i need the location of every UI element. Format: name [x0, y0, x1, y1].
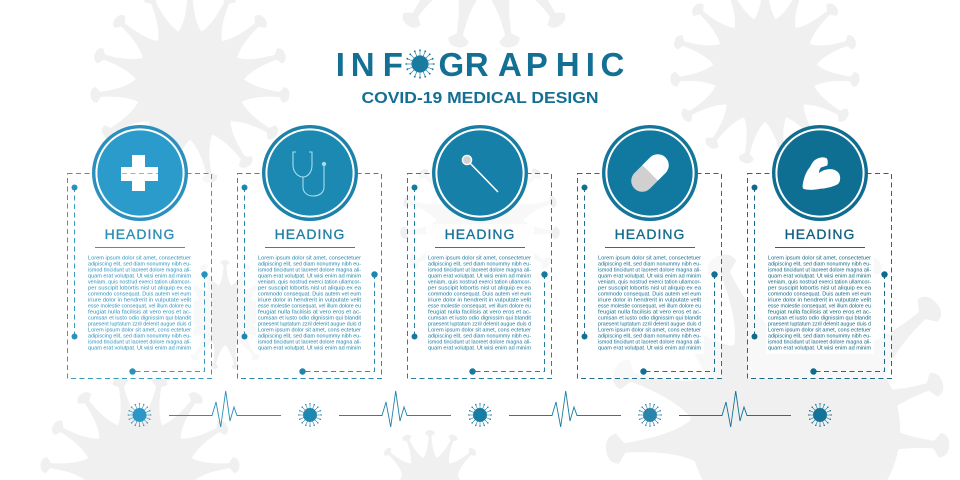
text block: per suscipit lobortis nisl ut aliquip ex ea: [428, 285, 532, 291]
text block: per suscipit lobortis nisl ut aliquip ex ea: [768, 285, 872, 291]
heartbeat line 1: [169, 391, 281, 427]
text block: Lorem ipsum dolor sit amet, cons ectetuer: [88, 327, 191, 333]
icon: stethoscope: [293, 152, 326, 196]
text block: per suscipit lobortis nisl ut aliquip ex ea: [258, 285, 362, 291]
icon: virus 1: [128, 403, 151, 427]
text block: praesent luptatum zzril delenit augue duis d: [598, 321, 701, 327]
text block: praesent luptatum zzril delenit augue duis d: [258, 321, 361, 327]
text block: ismod tincidunt ut laoreet dolore magna ali-: [258, 267, 361, 273]
text block: [768, 255, 872, 351]
text block: commodo consequat. Duis autem vel eum: [598, 291, 701, 297]
text block: ismod tincidunt ut laoreet dolore magna ali-: [258, 339, 361, 345]
subtitle: COVID-19 MEDICAL DESIGN: [362, 90, 598, 107]
text block: quam erat volutpat. Ut wisi enim ad minim: [258, 345, 361, 351]
text block: quam erat volutpat. Ut wisi enim ad minim: [258, 273, 361, 279]
text block: iriure dolor in hendrerit in vulputate velit: [598, 297, 702, 303]
text block: feugiat nulla facilisis at vero eros et ac-: [88, 309, 191, 315]
text block: adipiscing elit, sed diam nonummy nibh eu-: [768, 261, 871, 267]
text block: commodo consequat. Duis autem vel eum: [258, 291, 361, 297]
text block: [258, 255, 362, 351]
icon: virus letter O: [405, 49, 435, 79]
text block: quam erat volutpat. Ut wisi enim ad minim: [88, 345, 191, 351]
text block: esse molestie consequat, vel illum dolore eu: [88, 303, 191, 309]
text block: feugiat nulla facilisis at vero eros et ac-: [768, 309, 871, 315]
text block: esse molestie consequat, vel illum dolore eu: [258, 303, 361, 309]
text block: cumsan et iusto odio dignissim qui blandit: [88, 315, 191, 321]
title: [336, 46, 624, 107]
text block: [428, 255, 532, 351]
text block: esse molestie consequat, vel illum dolore eu: [598, 303, 701, 309]
text block: ismod tincidunt ut laoreet dolore magna ali-: [88, 339, 191, 345]
text block: Lorem ipsum dolor sit amet, cons ectetuer: [258, 327, 361, 333]
text block: adipiscing elit, sed diam nonummy nibh eu-: [428, 261, 531, 267]
text block: adipiscing elit, sed diam nonummy nibh eu-: [88, 261, 191, 267]
heading: HEADING: [445, 226, 515, 242]
text block: cumsan et iusto odio dignissim qui blandit: [598, 315, 701, 321]
text block: commodo consequat. Duis autem vel eum: [428, 291, 531, 297]
text block: commodo consequat. Duis autem vel eum: [768, 291, 871, 297]
text block: Lorem ipsum dolor sit amet, consectetuer: [768, 255, 871, 261]
text block: iriure dolor in hendrerit in vulputate velit: [88, 297, 192, 303]
text block: adipiscing elit, sed diam nonummy nibh eu-: [598, 333, 701, 339]
text block: adipiscing elit, sed diam nonummy nibh eu-: [598, 261, 701, 267]
heading: HEADING: [275, 226, 345, 242]
icon: virus 3: [468, 403, 492, 427]
text block: esse molestie consequat, vel illum dolore eu: [768, 303, 871, 309]
text block: per suscipit lobortis nisl ut aliquip ex ea: [598, 285, 702, 291]
heading: HEADING: [105, 226, 175, 242]
text block: cumsan et iusto odio dignissim qui blandit: [768, 315, 871, 321]
title word: INFOGRAPHIC: INF: [336, 46, 403, 83]
text block: praesent luptatum zzril delenit augue duis d: [768, 321, 871, 327]
text block: Lorem ipsum dolor sit amet, consectetuer: [88, 255, 191, 261]
text block: praesent luptatum zzril delenit augue duis d: [428, 321, 531, 327]
text block: ismod tincidunt ut laoreet dolore magna ali-: [428, 339, 531, 345]
text block: quam erat volutpat. Ut wisi enim ad minim: [88, 273, 191, 279]
heartbeat line 4: [679, 391, 791, 427]
text block: Lorem ipsum dolor sit amet, cons ectetuer: [598, 327, 701, 333]
text block: ismod tincidunt ut laoreet dolore magna ali-: [598, 267, 701, 273]
panel: card 4: [578, 125, 722, 378]
text block: veniam, quis nostrud exerci tation ullamcor-: [258, 279, 361, 285]
text block: quam erat volutpat. Ut wisi enim ad minim: [768, 345, 871, 351]
icon: swab: [462, 155, 498, 192]
text block: iriure dolor in hendrerit in vulputate velit: [768, 297, 872, 303]
text block: feugiat nulla facilisis at vero eros et ac-: [598, 309, 701, 315]
icon: virus 5: [808, 403, 832, 427]
panel: card 3: [408, 125, 552, 378]
text block: quam erat volutpat. Ut wisi enim ad minim: [598, 345, 701, 351]
text block: [88, 255, 192, 351]
text block: Lorem ipsum dolor sit amet, cons ectetuer: [768, 327, 871, 333]
text block: Lorem ipsum dolor sit amet, consectetuer: [598, 255, 701, 261]
heartbeat line 2: [339, 391, 451, 427]
heading: HEADING: [615, 226, 685, 242]
title word: INFOGRAPHIC: [336, 46, 624, 83]
text block: adipiscing elit, sed diam nonummy nibh eu-: [428, 333, 531, 339]
text block: Lorem ipsum dolor sit amet, cons ectetuer: [428, 327, 531, 333]
icon: capsule: [627, 150, 673, 196]
text block: ismod tincidunt ut laoreet dolore magna ali-: [768, 339, 871, 345]
icon: medical cross: [121, 155, 158, 191]
panel: card 1: [68, 125, 212, 378]
text block: iriure dolor in hendrerit in vulputate velit: [258, 297, 362, 303]
text block: iriure dolor in hendrerit in vulputate velit: [428, 297, 532, 303]
text block: per suscipit lobortis nisl ut aliquip ex ea: [88, 285, 192, 291]
text block: quam erat volutpat. Ut wisi enim ad minim: [428, 273, 531, 279]
text block: veniam, quis nostrud exerci tation ullamcor-: [88, 279, 191, 285]
panel: card 5: [748, 125, 892, 378]
text block: veniam, quis nostrud exerci tation ullamcor-: [428, 279, 531, 285]
text block: praesent luptatum zzril delenit augue duis d: [88, 321, 191, 327]
text block: ismod tincidunt ut laoreet dolore magna ali-: [768, 267, 871, 273]
timeline: viruses and heartbeat lines: [128, 391, 832, 427]
text block: ismod tincidunt ut laoreet dolore magna ali-: [598, 339, 701, 345]
text block: feugiat nulla facilisis at vero eros et ac-: [428, 309, 531, 315]
text block: adipiscing elit, sed diam nonummy nibh eu-: [768, 333, 871, 339]
text block: quam erat volutpat. Ut wisi enim ad minim: [768, 273, 871, 279]
icon: virus 4: [638, 403, 662, 427]
text block: adipiscing elit, sed diam nonummy nibh eu-: [258, 261, 361, 267]
text block: Lorem ipsum dolor sit amet, consectetuer: [428, 255, 531, 261]
text block: cumsan et iusto odio dignissim qui blandit: [428, 315, 531, 321]
text block: quam erat volutpat. Ut wisi enim ad minim: [598, 273, 701, 279]
text block: veniam, quis nostrud exerci tation ullamcor-: [768, 279, 871, 285]
panel: card 2: [238, 125, 382, 378]
text block: feugiat nulla facilisis at vero eros et ac-: [258, 309, 361, 315]
text block: adipiscing elit, sed diam nonummy nibh eu-: [88, 333, 191, 339]
heartbeat line 3: [509, 391, 621, 427]
text block: commodo consequat. Duis autem vel eum: [88, 291, 191, 297]
text block: esse molestie consequat, vel illum dolore eu: [428, 303, 531, 309]
text block: ismod tincidunt ut laoreet dolore magna ali-: [428, 267, 531, 273]
text block: Lorem ipsum dolor sit amet, consectetuer: [258, 255, 361, 261]
icon: flexed arm: [803, 157, 840, 190]
text block: quam erat volutpat. Ut wisi enim ad minim: [428, 345, 531, 351]
heading: HEADING: [785, 226, 855, 242]
icon: virus 2: [298, 403, 322, 427]
text block: [598, 255, 702, 351]
text block: ismod tincidunt ut laoreet dolore magna ali-: [88, 267, 191, 273]
text block: cumsan et iusto odio dignissim qui blandit: [258, 315, 361, 321]
text block: adipiscing elit, sed diam nonummy nibh eu-: [258, 333, 361, 339]
text block: veniam, quis nostrud exerci tation ullamcor-: [598, 279, 701, 285]
title word: INFOGRAPHIC: GRAPHIC: [438, 46, 624, 83]
